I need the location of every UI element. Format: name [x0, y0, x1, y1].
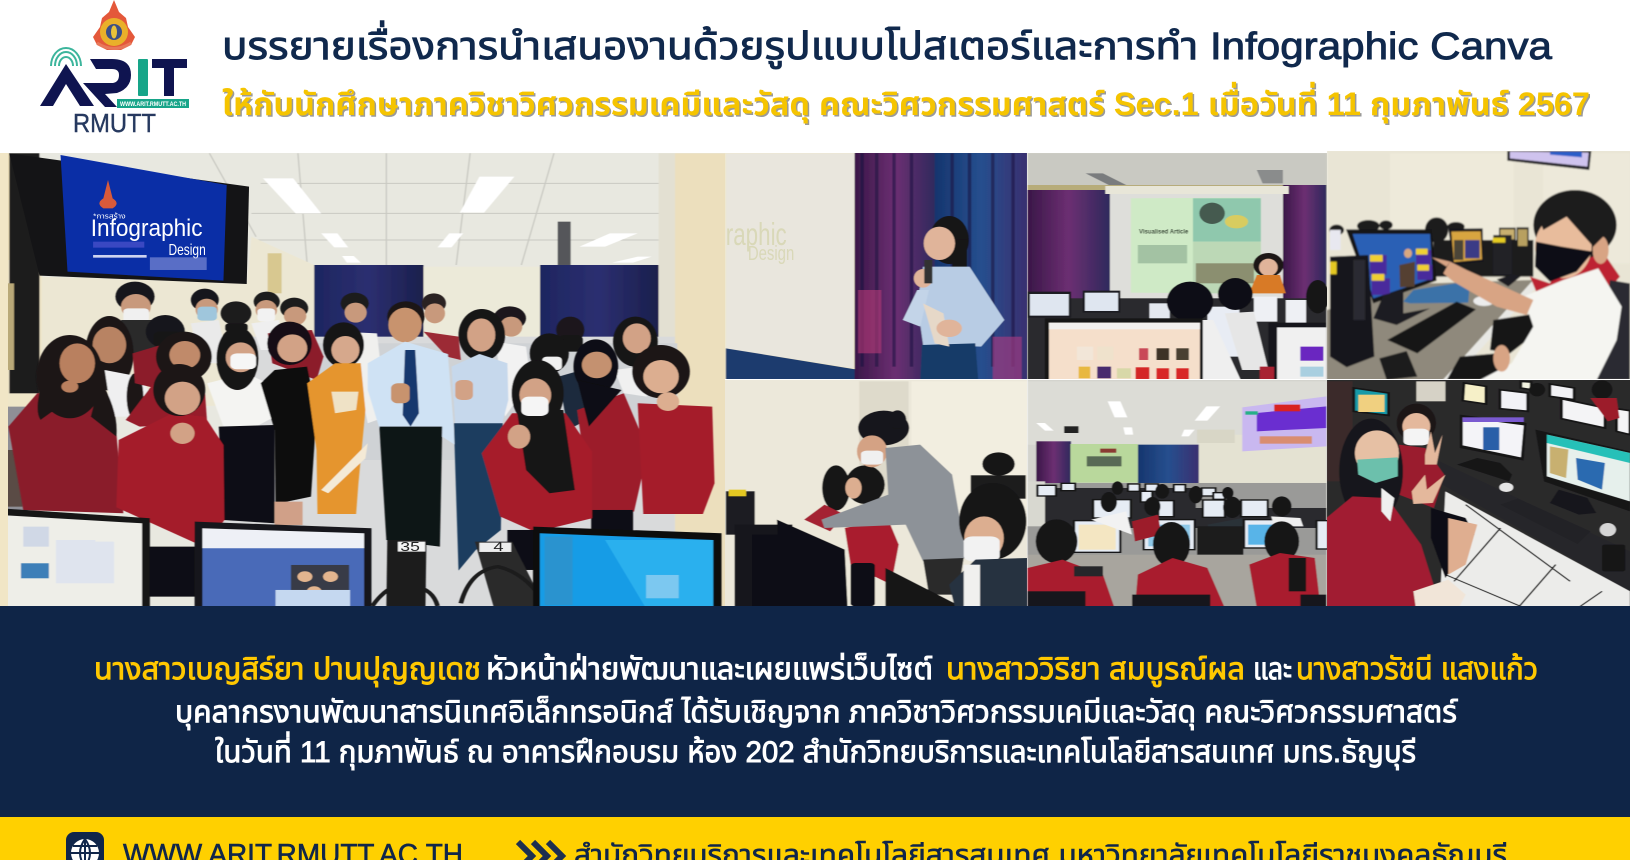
tv screen: *การสร้าง [93, 212, 126, 220]
bag [1403, 281, 1470, 303]
line 1 [94, 653, 1538, 687]
head [1533, 190, 1617, 260]
wall right [1198, 444, 1326, 483]
subtitle: ให้กับนักศึกษาภาควิชาวิศวกรรมเคมีและวัสดุ คณะวิศวกรรมศาสตร์ Sec.1 เมื่อวันที่ 11 กุมภาพันธ์ 2567 [222, 81, 1590, 123]
woman in light-blue top [459, 309, 505, 361]
photo: lecture room with slide: Visualised Article [1139, 228, 1188, 235]
line 1: นางสาวรัชนี แสงแก้ว [1296, 653, 1538, 686]
desk [1327, 280, 1533, 383]
distant students [1357, 220, 1380, 232]
logo letter T [152, 59, 187, 96]
photo: speaker with microphone: Design [748, 242, 794, 265]
photo: student pointing at monitor [1327, 150, 1630, 383]
pc tower [1330, 255, 1374, 367]
woman in orange dress [323, 322, 364, 368]
back girl [1397, 404, 1436, 442]
right girl [638, 403, 715, 514]
man in blue shirt [386, 301, 426, 324]
foreground student [958, 492, 1027, 559]
logo RMUTT wordmark: RMUTT [73, 108, 156, 138]
monitors [1028, 292, 1071, 318]
monitor marketing mix [1346, 229, 1437, 303]
photo: computer lab room [1028, 378, 1329, 611]
logo web address tag: WWW.ARIT.RMUTT.AC.TH [120, 101, 186, 108]
photo: speaker with microphone [720, 150, 1028, 383]
icon: signal arcs [51, 48, 81, 66]
back student [982, 452, 1015, 476]
photo: lecture room with slide [1028, 150, 1329, 383]
logo letter A [40, 64, 94, 106]
left students [85, 316, 134, 391]
line 1: หัวหน้าฝ่ายพัฒนาและเผยแพร่เว็บไซต์ [486, 653, 933, 686]
background monitors [1354, 381, 1630, 435]
logo letter R [83, 59, 131, 107]
curtains and slide [1036, 441, 1071, 483]
panel: footer band [0, 817, 1630, 860]
desk [1440, 461, 1630, 591]
header background [0, 0, 1630, 153]
line 1: นางสาวเบญสิร์ยา ปานปุญญเดช [94, 653, 481, 687]
logo web address tag [117, 99, 189, 108]
line 3: ในวันที่ 11 กุมภาพันธ์ ณ อาคารฝึกอบรม ห้อง 202 สำนักวิทยบริการและเทคโนโลยีสารสนเทศ มทร.ธัญบุรี [215, 731, 1416, 770]
monitors [0, 508, 150, 610]
photo: group portrait: 35 [400, 540, 420, 554]
front-left girl [116, 413, 224, 547]
line 1: และ [1253, 653, 1292, 686]
instructor [858, 411, 909, 445]
front girl [1339, 419, 1403, 524]
photo: instructor helping students [720, 378, 1028, 611]
tv screen [9, 153, 249, 284]
back row men [115, 282, 155, 312]
photo: speaker with microphone: raphic [726, 216, 787, 252]
keyboards [1387, 302, 1476, 353]
hijab girl [577, 393, 648, 512]
title: บรรยายเรื่องการนำเสนองานด้วยรูปแบบโปสเตอร์และการทำ Infographic Canva [222, 20, 1553, 69]
second monitor [1447, 227, 1484, 242]
tv [1242, 396, 1326, 451]
subtitle shadow: ให้กับนักศึกษาภาควิชาวิศวกรรมเคมีและวัสดุ คณะวิศวกรรมศาสตร์ Sec.1 เมื่อวันที่ 11 กุมภาพันธ์ 2567 [224, 82, 1592, 124]
floor / desks [1027, 483, 1327, 555]
equipment [726, 491, 755, 535]
monitors [1037, 483, 1328, 552]
woman in black dress [267, 322, 312, 365]
line 1: นางสาววิริยา สมบูรณ์ผล [946, 653, 1245, 687]
panel: description band [0, 606, 1630, 817]
photo: group portrait: 4 [493, 540, 504, 554]
seated student [1530, 256, 1620, 292]
text block: description [94, 653, 1538, 770]
icon: university crest [93, 0, 135, 50]
main monitors [1460, 415, 1527, 461]
line 2: บุคลากรงานพัฒนาสารนิเทศอิเล็กทรอนิกส์ ได้รับเชิญจาก ภาควิชาวิศวกรรมเคมีและวัสดุ คณะวิศวกรรมศาสตร์ [175, 696, 1458, 730]
logo letter I [138, 59, 148, 96]
right back students [530, 333, 569, 373]
tv screen: Design [169, 241, 206, 259]
panel: photo left strip [0, 153, 8, 606]
tv screen: Infographic [91, 215, 202, 242]
icon: chevrons [518, 842, 562, 860]
presenter [1253, 253, 1283, 277]
students [1101, 481, 1292, 518]
logo: ARIT RMUTT [40, 0, 189, 138]
speaker [929, 216, 969, 264]
left students [822, 465, 850, 511]
photo: students with peace sign [1326, 378, 1630, 611]
icon: globe [66, 832, 104, 860]
photo: group portrait [0, 150, 731, 610]
center-front girl [482, 413, 592, 532]
